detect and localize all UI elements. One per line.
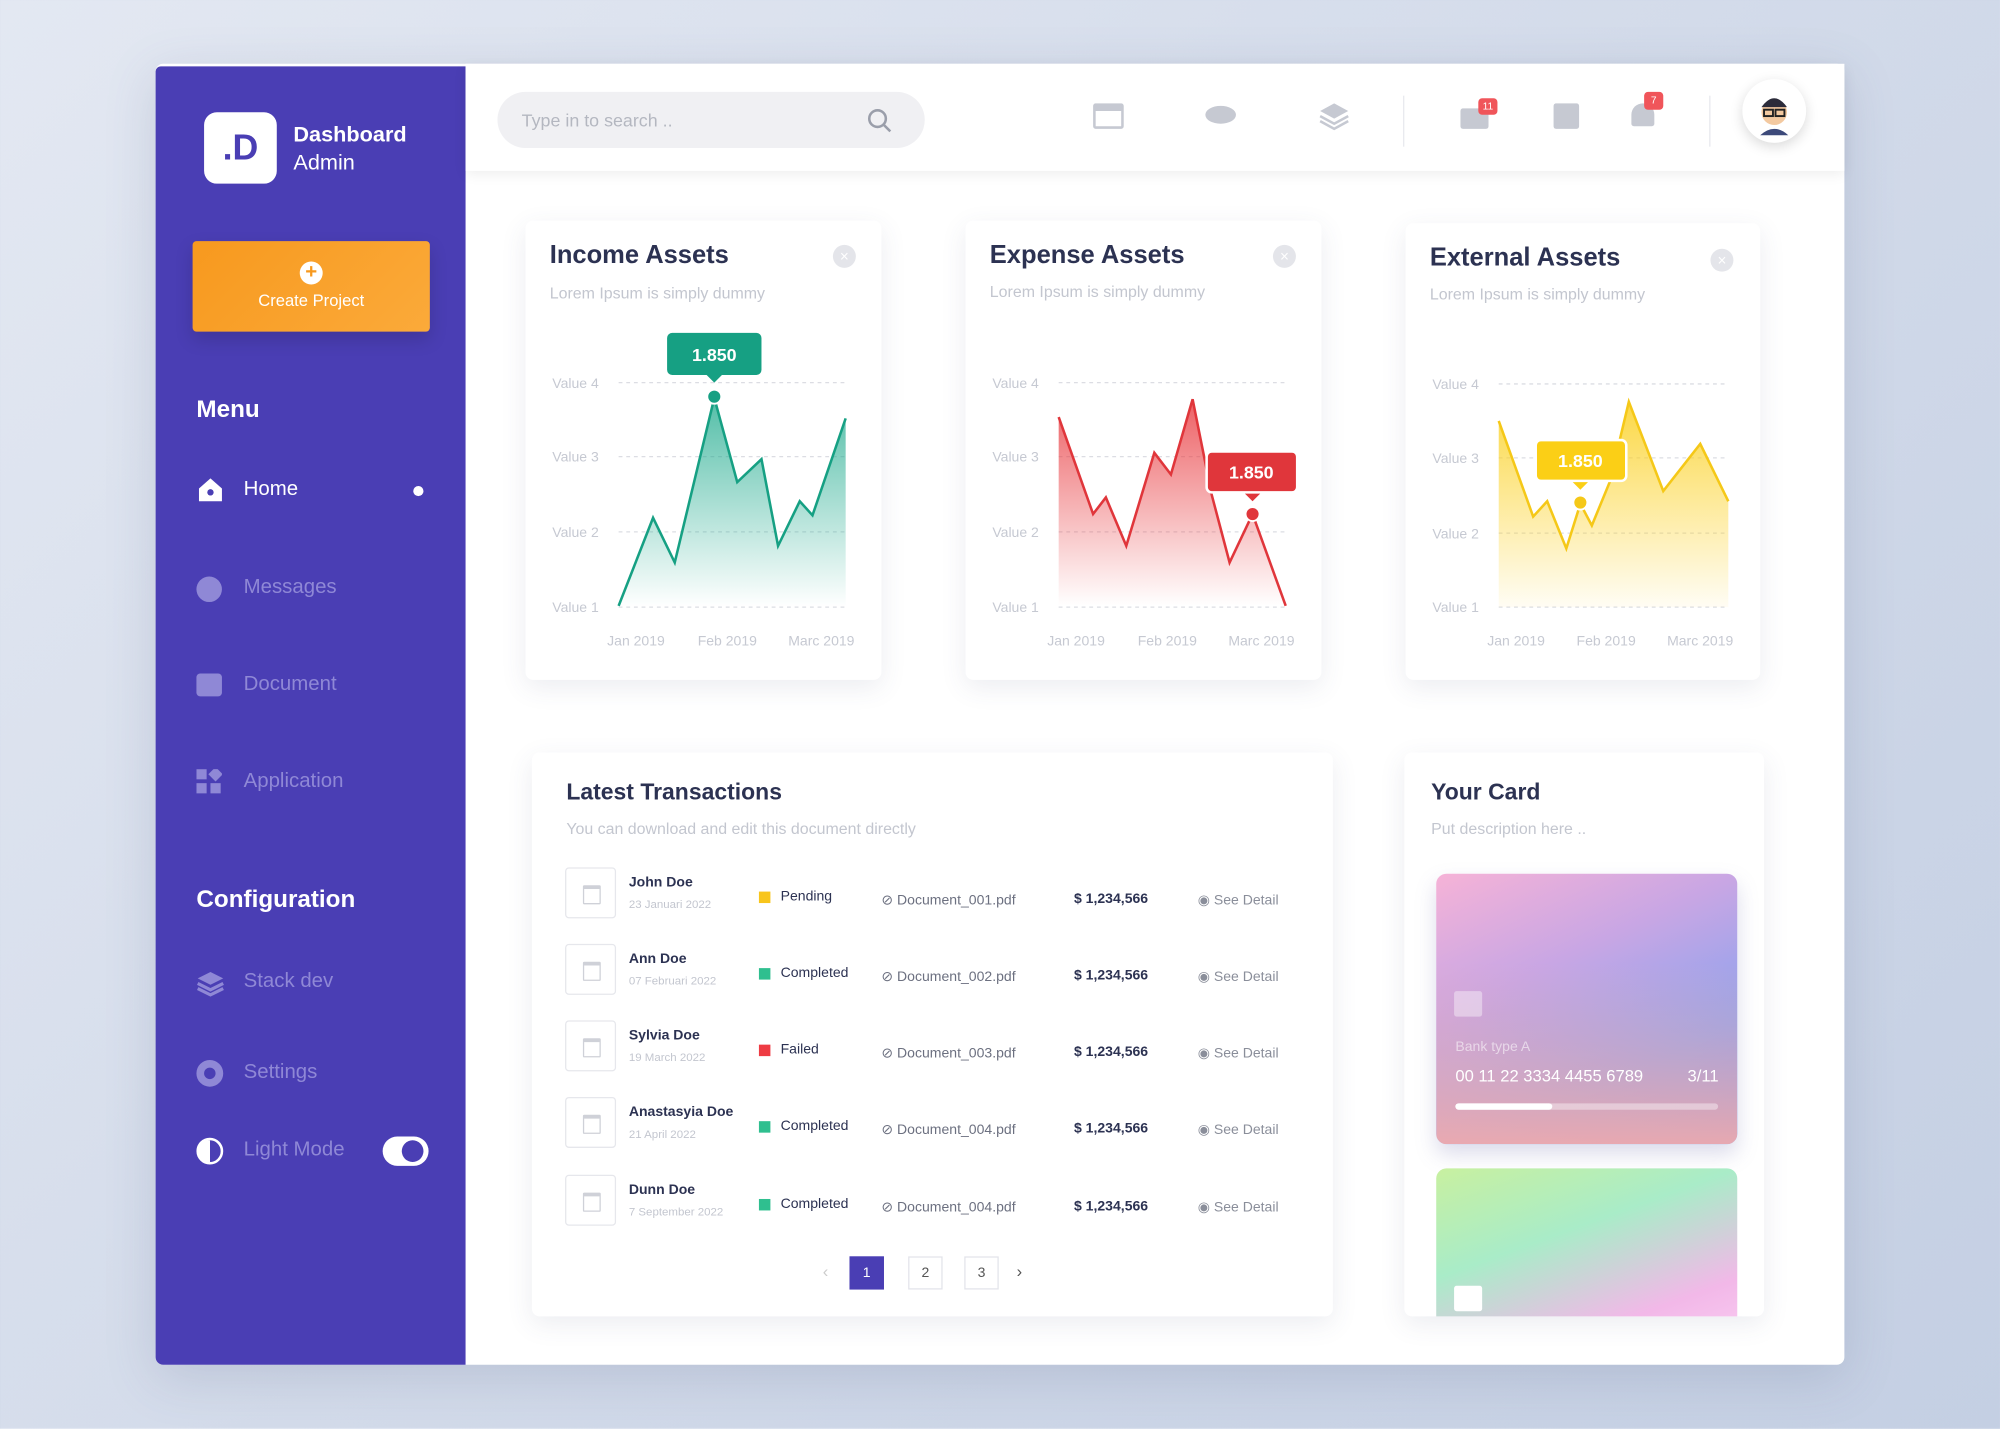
row 3: ⊘ Document_003.pdf <box>881 1046 1016 1061</box>
chart: expense: Value 3 <box>992 449 1039 465</box>
row 2: $ 1,234,566 <box>1074 968 1148 983</box>
avatar <box>1742 79 1806 143</box>
panel: latest transactions: Latest Transactions <box>566 779 782 805</box>
settings item: Settings <box>244 1061 317 1083</box>
brand text: Dashboard <box>293 122 407 147</box>
row 3: Sylvia Doe <box>629 1028 700 1043</box>
pagination: 1 <box>863 1265 871 1281</box>
chart: external: Value 3 <box>1432 450 1479 466</box>
panel: your card <box>1404 753 1764 1316</box>
credit card 1: Bank type A <box>1455 1040 1530 1055</box>
search box: Type in to search .. <box>522 110 673 130</box>
credit card 1: 00 11 22 3334 4455 6789 <box>1455 1066 1643 1085</box>
card: expense assets <box>966 221 1321 680</box>
document item <box>196 673 337 696</box>
row 5: ◉ See Detail <box>1198 1200 1279 1216</box>
pagination: 3 <box>978 1265 985 1281</box>
row 4: ⊘ Document_004.pdf <box>881 1122 1016 1138</box>
create project button <box>193 241 430 332</box>
home item: Home <box>244 478 298 500</box>
chart: income: Value 2 <box>552 524 599 540</box>
light mode toggle <box>196 1136 429 1166</box>
row 5: 7 September 2022 <box>629 1205 723 1218</box>
document item: Document <box>244 673 337 695</box>
row 3: $ 1,234,566 <box>1074 1045 1148 1060</box>
header icons: 11 <box>1483 101 1493 112</box>
pagination <box>823 1256 1022 1290</box>
search box <box>497 92 925 148</box>
settings item <box>196 1060 317 1087</box>
chart: expense: Value 2 <box>992 524 1039 540</box>
row 3 <box>565 1020 1279 1072</box>
brand text <box>293 122 407 175</box>
brand text: Admin <box>293 151 355 175</box>
panel: latest transactions: You can download and edit this document directly <box>566 820 916 838</box>
chart: external: Marc 2019 <box>1667 632 1734 648</box>
chart: external: 1.850 <box>1558 451 1603 471</box>
header icons <box>1093 92 1710 146</box>
chart: expense: Jan 2019 <box>1047 632 1105 648</box>
header icons: 7 <box>1651 94 1657 106</box>
logo <box>204 112 277 184</box>
row 5: $ 1,234,566 <box>1074 1199 1148 1214</box>
chart: external: Jan 2019 <box>1487 632 1545 648</box>
create project button: + <box>305 261 317 283</box>
logo: .D <box>223 128 258 167</box>
messages item <box>196 576 337 602</box>
pagination: ‹ <box>823 1261 828 1281</box>
row 5: ⊘ Document_004.pdf <box>881 1200 1016 1216</box>
chart: expense <box>992 375 1297 648</box>
chart: expense: 1.850 <box>1229 462 1274 482</box>
row 5 <box>565 1174 1279 1226</box>
card: expense assets: Expense Assets <box>990 241 1185 269</box>
row 1: 23 Januari 2022 <box>629 898 711 911</box>
chart: external: Value 2 <box>1432 525 1479 541</box>
row 5: Completed <box>781 1196 848 1212</box>
credit card 2 <box>1436 1168 1737 1334</box>
light mode toggle: Light Mode <box>244 1139 345 1161</box>
card: external assets: × <box>1717 251 1726 269</box>
chart: income: Marc 2019 <box>788 632 855 648</box>
row 3: 19 March 2022 <box>629 1051 705 1064</box>
create project button: Create Project <box>258 291 364 310</box>
row 2 <box>565 944 1279 995</box>
home item <box>199 478 424 502</box>
row 4: Anastasyia Doe <box>629 1105 733 1120</box>
row 2: Ann Doe <box>629 952 687 967</box>
chart: expense: Feb 2019 <box>1138 632 1197 648</box>
chart: income: Jan 2019 <box>607 632 665 648</box>
chart: expense: Value 1 <box>992 599 1039 615</box>
row 5: Dunn Doe <box>629 1182 695 1198</box>
row 1: $ 1,234,566 <box>1074 892 1148 907</box>
application item: Application <box>244 770 343 792</box>
card: income assets: Income Assets <box>550 241 729 269</box>
configuration heading: Configuration <box>196 886 355 913</box>
card: external assets: External Assets <box>1430 244 1620 272</box>
chart: income: 1.850 <box>692 345 737 365</box>
messages item: Messages <box>244 577 337 598</box>
row 2: ◉ See Detail <box>1198 969 1279 985</box>
chart: income: Value 3 <box>552 449 599 465</box>
row 4: 21 April 2022 <box>629 1128 696 1140</box>
card: external assets: Lorem Ipsum is simply dummy <box>1430 286 1645 304</box>
sidebar <box>156 66 466 1365</box>
credit card 1: 3/11 <box>1687 1066 1719 1085</box>
chart: external: Feb 2019 <box>1577 632 1636 648</box>
stack dev item: Stack dev <box>244 971 333 992</box>
chart: external <box>1432 376 1734 648</box>
row 3: ◉ See Detail <box>1198 1046 1279 1061</box>
panel: your card: Your Card <box>1431 779 1540 805</box>
chart: expense: Value 4 <box>992 375 1039 391</box>
card: expense assets: Lorem Ipsum is simply dummy <box>990 283 1205 301</box>
row 1: ◉ See Detail <box>1198 893 1279 908</box>
menu heading: Menu <box>196 397 260 423</box>
row 1: ⊘ Document_001.pdf <box>881 893 1016 908</box>
row 1 <box>565 868 1279 918</box>
chart: income: Value 4 <box>552 375 599 391</box>
top bar <box>466 64 1844 171</box>
chart: income <box>552 333 855 648</box>
row 4 <box>565 1097 1279 1148</box>
credit card 1 <box>1436 874 1737 1144</box>
row 2: ⊘ Document_002.pdf <box>881 969 1016 985</box>
card: income assets: Lorem Ipsum is simply dummy <box>550 284 765 302</box>
card: expense assets: × <box>1280 247 1289 265</box>
panel: latest transactions <box>532 753 1333 1316</box>
row 4: Completed <box>781 1119 848 1134</box>
row 4: $ 1,234,566 <box>1074 1121 1148 1136</box>
chart: expense: Marc 2019 <box>1228 632 1295 648</box>
card: external assets <box>1406 223 1760 680</box>
row 1: Pending <box>781 889 832 904</box>
row 2: 07 Februari 2022 <box>629 974 716 987</box>
row 3: Failed <box>781 1042 819 1057</box>
chart: income: Value 1 <box>552 599 599 615</box>
pagination: › <box>1017 1261 1022 1281</box>
chart: external: Value 4 <box>1432 376 1479 392</box>
row 2: Completed <box>781 966 848 981</box>
application item <box>196 769 343 794</box>
stack dev item <box>197 971 333 996</box>
main panel <box>156 64 1844 1365</box>
card: income assets: × <box>840 247 849 265</box>
chart: income: Feb 2019 <box>698 632 757 648</box>
row 1: John Doe <box>629 875 693 890</box>
card: income assets <box>526 221 881 680</box>
panel: your card: Put description here .. <box>1431 820 1586 838</box>
row 4: ◉ See Detail <box>1198 1122 1279 1138</box>
chart: external: Value 1 <box>1432 599 1479 615</box>
pagination: 2 <box>921 1265 929 1281</box>
